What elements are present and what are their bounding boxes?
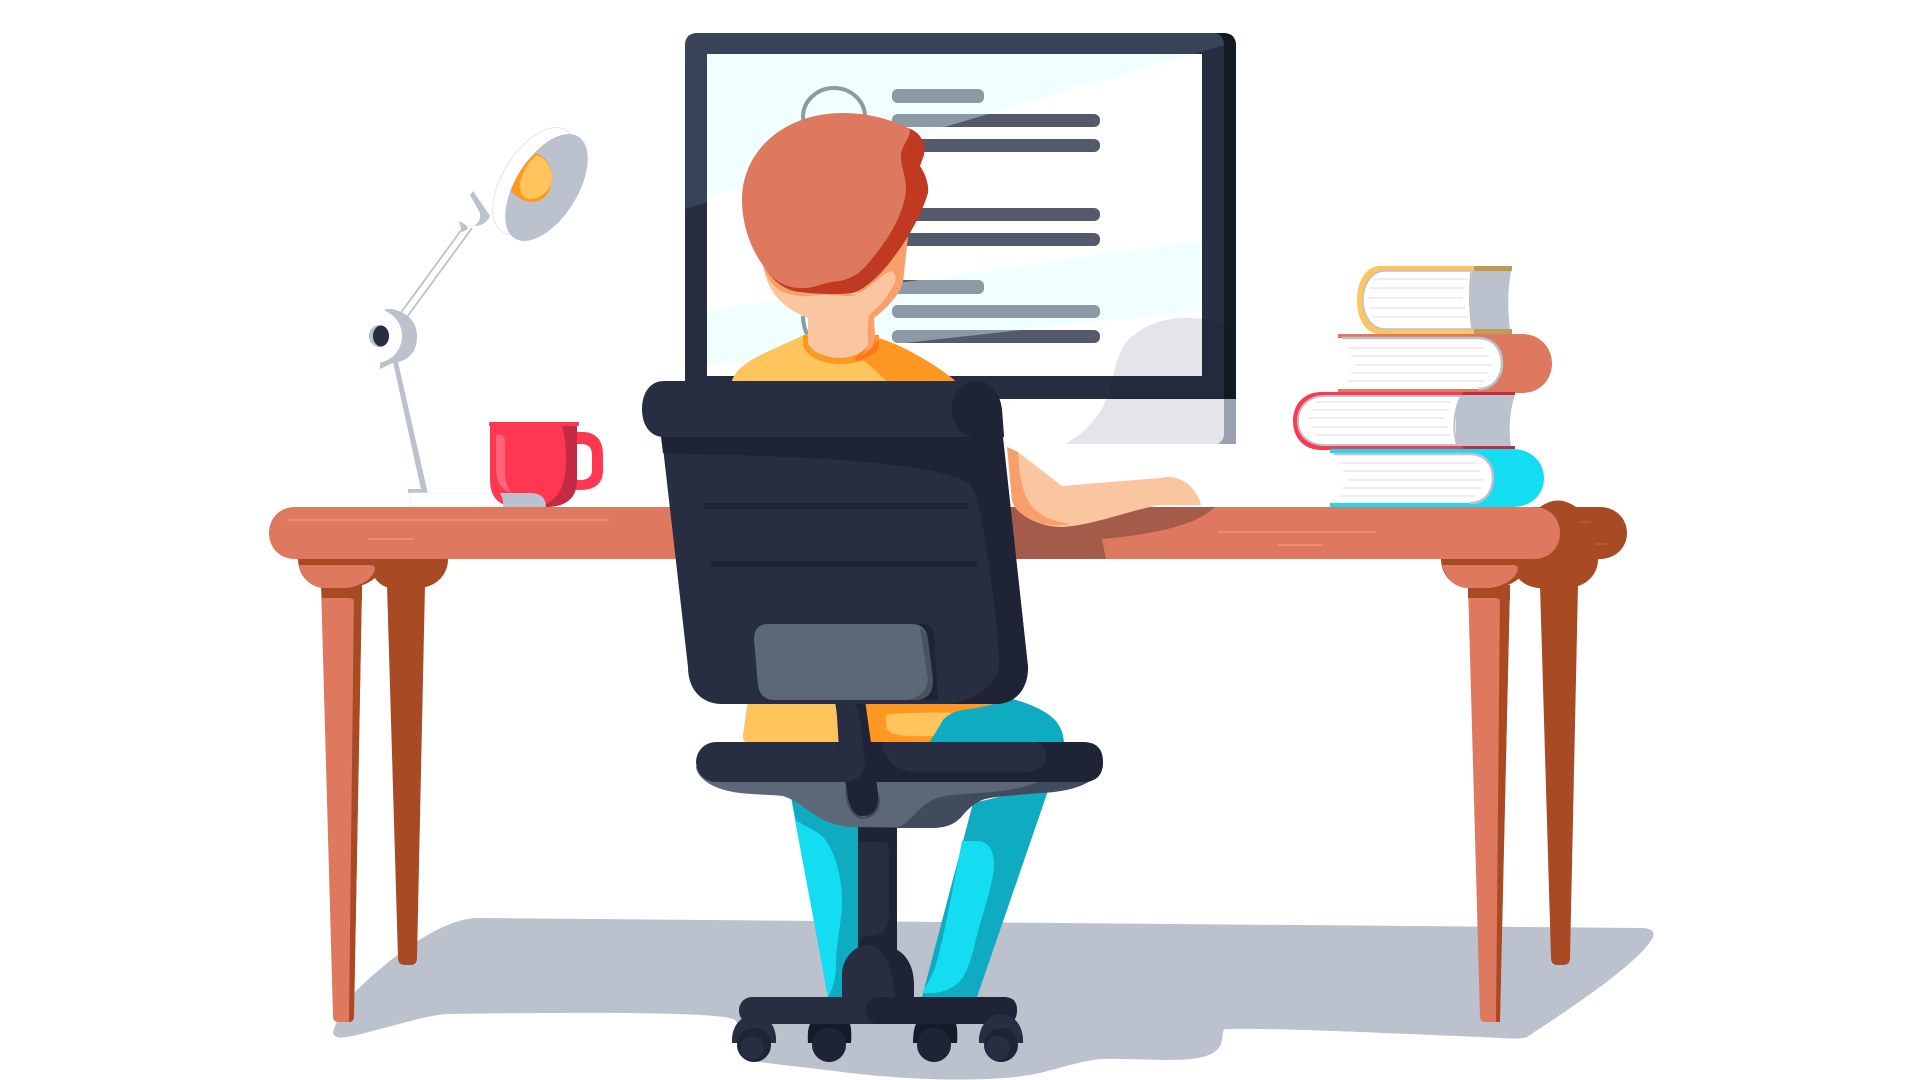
- red book: [1293, 392, 1515, 450]
- wood grain: [287, 520, 1376, 545]
- chair strut: [835, 700, 879, 816]
- grey book end: [500, 493, 546, 507]
- desk lamp: [369, 127, 588, 493]
- chair base: [732, 820, 1023, 1062]
- monitor: [685, 33, 1236, 444]
- mug: [489, 422, 603, 507]
- left leg: [791, 797, 858, 997]
- lamp joint: [380, 309, 417, 369]
- mug handle: [572, 432, 603, 490]
- lumbar pad: [880, 624, 938, 700]
- neck and ear: [762, 237, 908, 358]
- back left table leg: [369, 559, 448, 965]
- lamp lower arm: [393, 362, 428, 494]
- front right table leg: [1441, 559, 1527, 1022]
- hair shadow: [765, 128, 928, 294]
- avatar ring on screen: [803, 88, 865, 146]
- cyan book: [1330, 449, 1544, 507]
- caster wheels: [732, 1014, 1023, 1062]
- floor shadow: [333, 918, 1654, 1080]
- shirt shoulders: [731, 330, 960, 385]
- chair back: [642, 381, 1028, 704]
- monitor frame: [685, 33, 1236, 399]
- chair dome: [842, 945, 914, 1000]
- salmon book: [1338, 334, 1552, 393]
- mug body: [490, 424, 577, 507]
- yellow book: [1357, 266, 1512, 334]
- monitor stand: [950, 399, 1236, 444]
- person: [731, 113, 1201, 527]
- arm: [1007, 447, 1201, 527]
- lower shirt: [743, 700, 1000, 745]
- hair: [742, 113, 910, 288]
- right leg and knee: [922, 699, 1064, 997]
- backrest grooves: [704, 503, 977, 567]
- back right table leg: [1510, 559, 1598, 965]
- chair seat underside: [696, 700, 1103, 828]
- neck collar: [803, 335, 879, 364]
- chair base bar: [739, 997, 1017, 1024]
- arm shadow on table: [1005, 507, 1215, 559]
- lamp shade: [476, 114, 592, 248]
- illustration: person at desk: [269, 33, 1654, 1080]
- stack of books: [1293, 266, 1552, 507]
- screen text lines: [892, 89, 1100, 343]
- table top: [269, 507, 1607, 559]
- lamp bulb: [510, 153, 552, 202]
- backrest panel: [661, 430, 1028, 704]
- lamp neck: [470, 191, 490, 226]
- front left table leg: [298, 559, 383, 1022]
- monitor highlight shape: [1065, 318, 1236, 444]
- headrest bar: [642, 381, 1004, 437]
- screen: [707, 54, 1202, 376]
- book page under lamp: [410, 493, 544, 507]
- table right dark end: [1500, 500, 1627, 559]
- chair seat: [696, 742, 1103, 782]
- chair pole: [858, 820, 897, 960]
- lamp base: [408, 489, 424, 493]
- lamp upper arm: [397, 225, 472, 318]
